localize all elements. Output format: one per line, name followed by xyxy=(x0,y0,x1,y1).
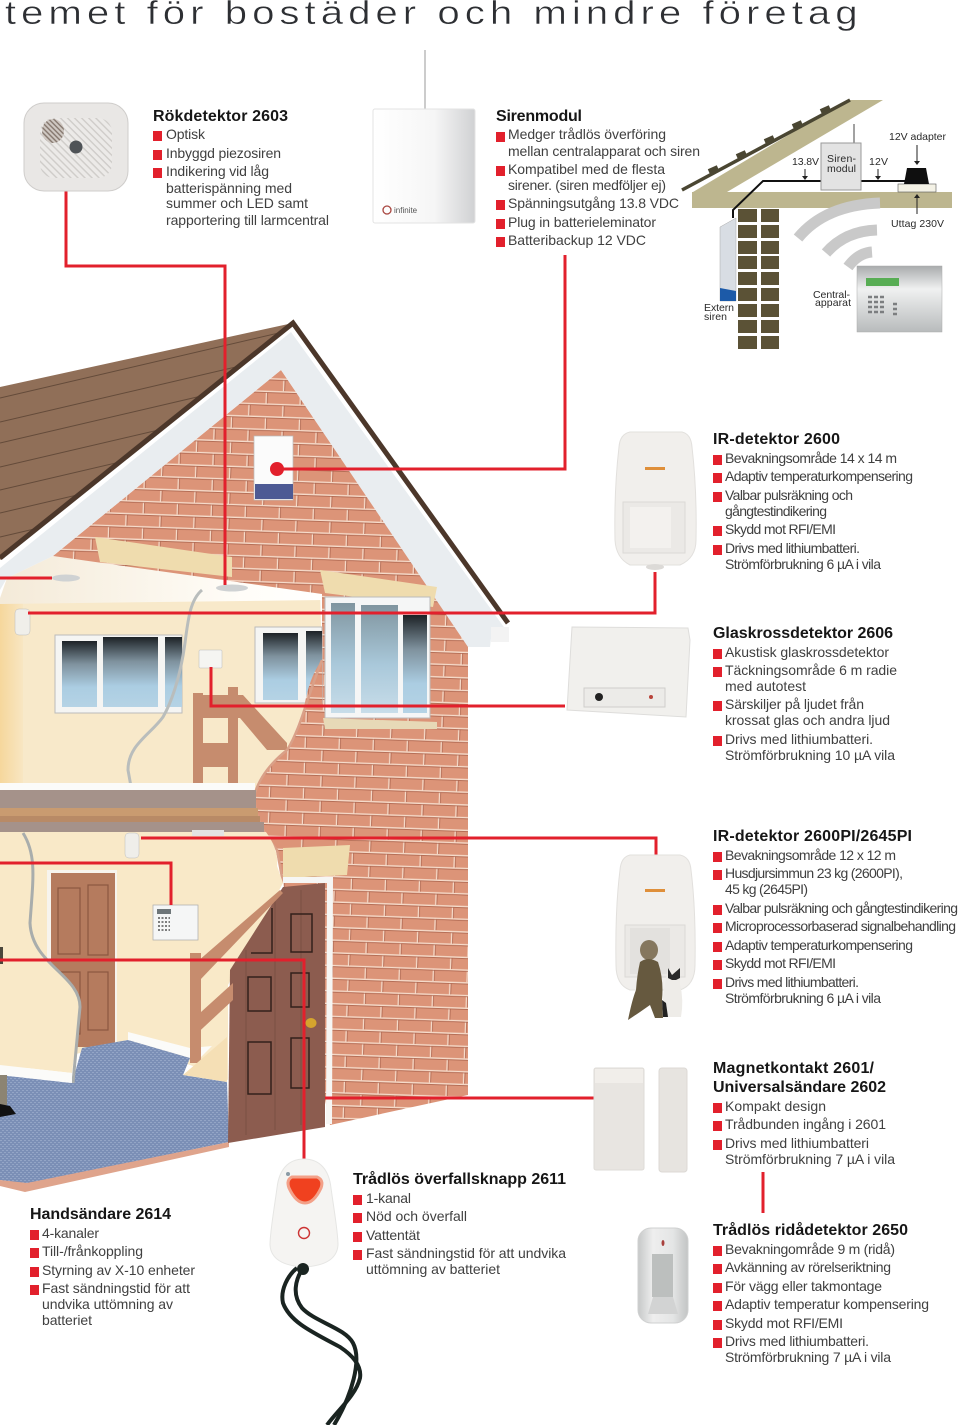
feature list: Vattentät xyxy=(366,1227,420,1243)
carpet xyxy=(0,1040,229,1184)
wave brick over window xyxy=(290,660,322,745)
interior: upper floor wall xyxy=(0,590,322,793)
feature list: undvika uttömning av xyxy=(42,1296,173,1312)
icon: smoke detector xyxy=(24,103,128,191)
feature list xyxy=(713,847,958,1006)
icon: glass break detector xyxy=(567,627,690,717)
feature list: krossat glas och andra ljud xyxy=(725,712,890,728)
arrows xyxy=(802,145,920,214)
diagram: siren wiring: Extern xyxy=(704,302,734,314)
diagram: siren wiring: siren xyxy=(704,311,727,323)
feature list: med autotest xyxy=(725,678,806,694)
feature list: Adaptiv temperaturkompensering xyxy=(725,468,913,484)
illustration: house cutaway xyxy=(0,323,509,1192)
brick wave outline xyxy=(255,660,322,883)
heading: Sirenmodul xyxy=(496,108,582,125)
icon: curtain detector xyxy=(638,1228,688,1323)
icon: pet-immune IR detector with dog and cat xyxy=(616,855,695,1020)
icon: siren module xyxy=(373,50,475,223)
feature list: gångtestindikering xyxy=(725,503,827,519)
feature list xyxy=(353,1190,566,1277)
feature list: Spänningsutgång 13.8 VDC xyxy=(508,195,679,211)
feature list: Skydd mot RFI/EMI xyxy=(725,955,836,971)
icon: siren module: infinite xyxy=(394,206,418,215)
feature list: Strömförbrukning 10 µA vila xyxy=(725,747,895,763)
outdoor siren on gable xyxy=(254,436,293,500)
panel: Magnetkontakt 2601 / Universalsändare 2602: Universalsändare 2602 xyxy=(713,1079,886,1096)
feature list: Drivs med lithiumbatteri. xyxy=(725,974,859,990)
feature list: Microprocessorbaserad signalbehandling xyxy=(725,918,956,934)
heading: IR-detektor 2600 xyxy=(713,431,840,448)
lower door back room xyxy=(47,870,117,1047)
red connector lines xyxy=(0,190,763,1213)
floor section xyxy=(0,790,264,832)
main door xyxy=(228,883,325,1143)
panel: Sirenmodul xyxy=(496,108,700,248)
feature list: Husdjursimmun 23 kg (2600PI), xyxy=(725,865,903,881)
feature list: Drivs med lithiumbatteri xyxy=(725,1135,869,1151)
diagram: siren wiring: apparat xyxy=(815,297,851,309)
panel: Trådlös ridådetektor 2650 xyxy=(713,1221,929,1365)
roof slab xyxy=(693,100,883,192)
feature list: Trådbunden ingång i 2601 xyxy=(725,1116,886,1132)
person legs xyxy=(0,947,16,1117)
panel: Handsändare 2614 xyxy=(30,1206,195,1328)
upper interior windows xyxy=(55,627,322,713)
siren module box: modul xyxy=(827,163,856,175)
panel: IR-detektor 2600PI/2645PI xyxy=(713,828,958,1006)
brick columns xyxy=(738,209,779,349)
door frame xyxy=(283,880,330,1124)
heading: Trådlös överfallsknapp 2611 xyxy=(353,1170,566,1188)
small sensors in house xyxy=(15,574,248,940)
heading: IR-detektor 2600PI/2645PI xyxy=(713,828,912,845)
feature list: För vägg eller takmontage xyxy=(725,1278,882,1294)
feature list: Adaptiv temperatur kompensering xyxy=(725,1296,929,1312)
roof tiles xyxy=(682,100,850,190)
foreground wall cut xyxy=(0,832,80,1083)
feature list: Indikering vid låg xyxy=(166,163,269,179)
wires xyxy=(733,181,907,218)
feature list: Bevakningsområde 12 x 12 m xyxy=(725,847,896,863)
feature list: Styrning av X-10 enheter xyxy=(42,1262,195,1278)
dog xyxy=(628,940,663,1020)
feature list xyxy=(30,1225,195,1328)
central unit xyxy=(857,266,942,332)
feature list: sirener. (siren medföljer ej) xyxy=(508,177,666,193)
feature list xyxy=(713,644,897,763)
feature list: Drivs med lithiumbatteri. xyxy=(725,1333,869,1349)
heading: Handsändare 2614 xyxy=(30,1206,171,1223)
panel: Trådlös överfallsknapp 2611 xyxy=(353,1170,566,1277)
gutter end xyxy=(491,627,509,642)
feature list: summer och LED samt xyxy=(166,195,308,211)
carpet edge xyxy=(0,1142,229,1192)
feature list: batteriet xyxy=(42,1312,92,1328)
feature list: rapportering till larmcentral xyxy=(166,212,329,228)
feature list: Kompatibel med de flesta xyxy=(508,161,665,177)
diagram labels: 13.8V xyxy=(792,156,819,168)
interior: lower floor wall xyxy=(0,832,283,1080)
upper banister xyxy=(193,687,287,790)
heading: Trådlös ridådetektor 2650 xyxy=(713,1221,908,1239)
feature list: Medger trådlös överföring xyxy=(508,126,666,142)
feature list: batterispänning med xyxy=(166,180,292,196)
feature list: Valbar pulsräkning och xyxy=(725,487,853,503)
feature list: Avkänning av rörelseriktning xyxy=(725,1259,891,1275)
feature list: Skydd mot RFI/EMI xyxy=(725,1315,843,1331)
heading: Magnetkontakt 2601/ xyxy=(713,1060,875,1077)
panel: Magnetkontakt 2601 / Universalsändare 2602 xyxy=(713,1060,895,1167)
feature list: Strömförbrukning 7 µA i vila xyxy=(725,1349,891,1365)
feature list: Nöd och överfall xyxy=(366,1208,467,1224)
feature list: Fast sändningstid för att undvika xyxy=(366,1245,566,1261)
diagram: siren wiring: 12V xyxy=(869,156,888,168)
cat xyxy=(662,968,682,1017)
feature list: Bevakningsområde 14 x 14 m xyxy=(725,450,897,466)
silver cut edge upper xyxy=(128,590,202,792)
feature list: Bevakningområde 9 m (ridå) xyxy=(725,1241,895,1257)
baseboard lower xyxy=(128,1032,212,1058)
external siren xyxy=(720,218,736,301)
adapter and outlet xyxy=(898,168,936,192)
siren module box xyxy=(821,124,861,190)
feature list xyxy=(713,1098,895,1167)
feature list: Batteribackup 12 VDC xyxy=(508,232,646,248)
feature list: Kompakt design xyxy=(725,1098,826,1114)
feature list: Strömförbrukning 6 µA i vila xyxy=(725,556,881,572)
icon: panic button with cord xyxy=(270,1159,360,1425)
feature list: mellan centralapparat och siren xyxy=(508,143,700,159)
diagram: siren wiring: 12V adapter xyxy=(889,131,946,143)
wireless waves xyxy=(798,203,880,267)
feature list: Inbyggd piezosiren xyxy=(166,145,281,161)
soffit xyxy=(0,556,325,604)
feature list: Särskiljer på ljudet från xyxy=(725,696,864,712)
feature list: Optisk xyxy=(166,126,206,142)
stone lintels xyxy=(95,537,437,878)
feature list: Drivs med lithiumbatteri. xyxy=(725,731,873,747)
feature list xyxy=(153,126,329,228)
feature list: Akustisk glaskrossdetektor xyxy=(725,644,889,660)
panel: IR-detektor 2600 xyxy=(713,431,913,572)
diagram: siren wiring: Central- xyxy=(813,289,850,301)
feature list: Valbar pulsräkning och gångtestindikering xyxy=(725,900,958,916)
large window xyxy=(323,597,437,729)
feature list: Plug in batterieleminator xyxy=(508,214,656,230)
feature list: 45 kg (2645PI) xyxy=(725,881,808,897)
brick wall xyxy=(53,370,468,1125)
stair rails lower xyxy=(190,890,283,1063)
feature list: uttömning av batteriet xyxy=(366,1261,500,1277)
feature list: Täckningsområde 6 m radie xyxy=(725,662,897,678)
diagram: siren wiring xyxy=(682,100,952,349)
feature list: Drivs med lithiumbatteri. xyxy=(725,540,860,556)
roof xyxy=(0,323,508,623)
feature list: 4-kanaler xyxy=(42,1225,99,1241)
white fascia boards xyxy=(0,332,506,647)
feature list: Till-/frånkoppling xyxy=(42,1243,143,1259)
feature list xyxy=(713,1241,929,1365)
feature list: Strömförbrukning 6 µA i vila xyxy=(725,990,881,1006)
feature list xyxy=(713,450,913,572)
panel: Glaskrossdetektor 2606 xyxy=(713,625,897,763)
siren module box: Siren- xyxy=(827,153,856,165)
panel: Rökdetektor 2603 xyxy=(153,108,329,228)
feature list: 1-kanal xyxy=(366,1190,411,1206)
heading: Rökdetektor 2603 xyxy=(153,108,288,125)
feature list: Strömförbrukning 7 µA i vila xyxy=(725,1151,895,1167)
cream triangle xyxy=(183,1037,227,1082)
feature list: Fast sändningstid för att xyxy=(42,1280,190,1296)
feature list xyxy=(496,126,700,248)
feature list: Adaptiv temperaturkompensering xyxy=(725,937,913,953)
icon: IR detector 2600 xyxy=(615,432,696,570)
feature list: Skydd mot RFI/EMI xyxy=(725,521,836,537)
diagram: siren wiring: Uttag 230V xyxy=(891,218,944,230)
baseboard upper xyxy=(0,783,255,790)
icon: magnetic contact xyxy=(594,1068,687,1172)
heading: Glaskrossdetektor 2606 xyxy=(713,625,893,642)
